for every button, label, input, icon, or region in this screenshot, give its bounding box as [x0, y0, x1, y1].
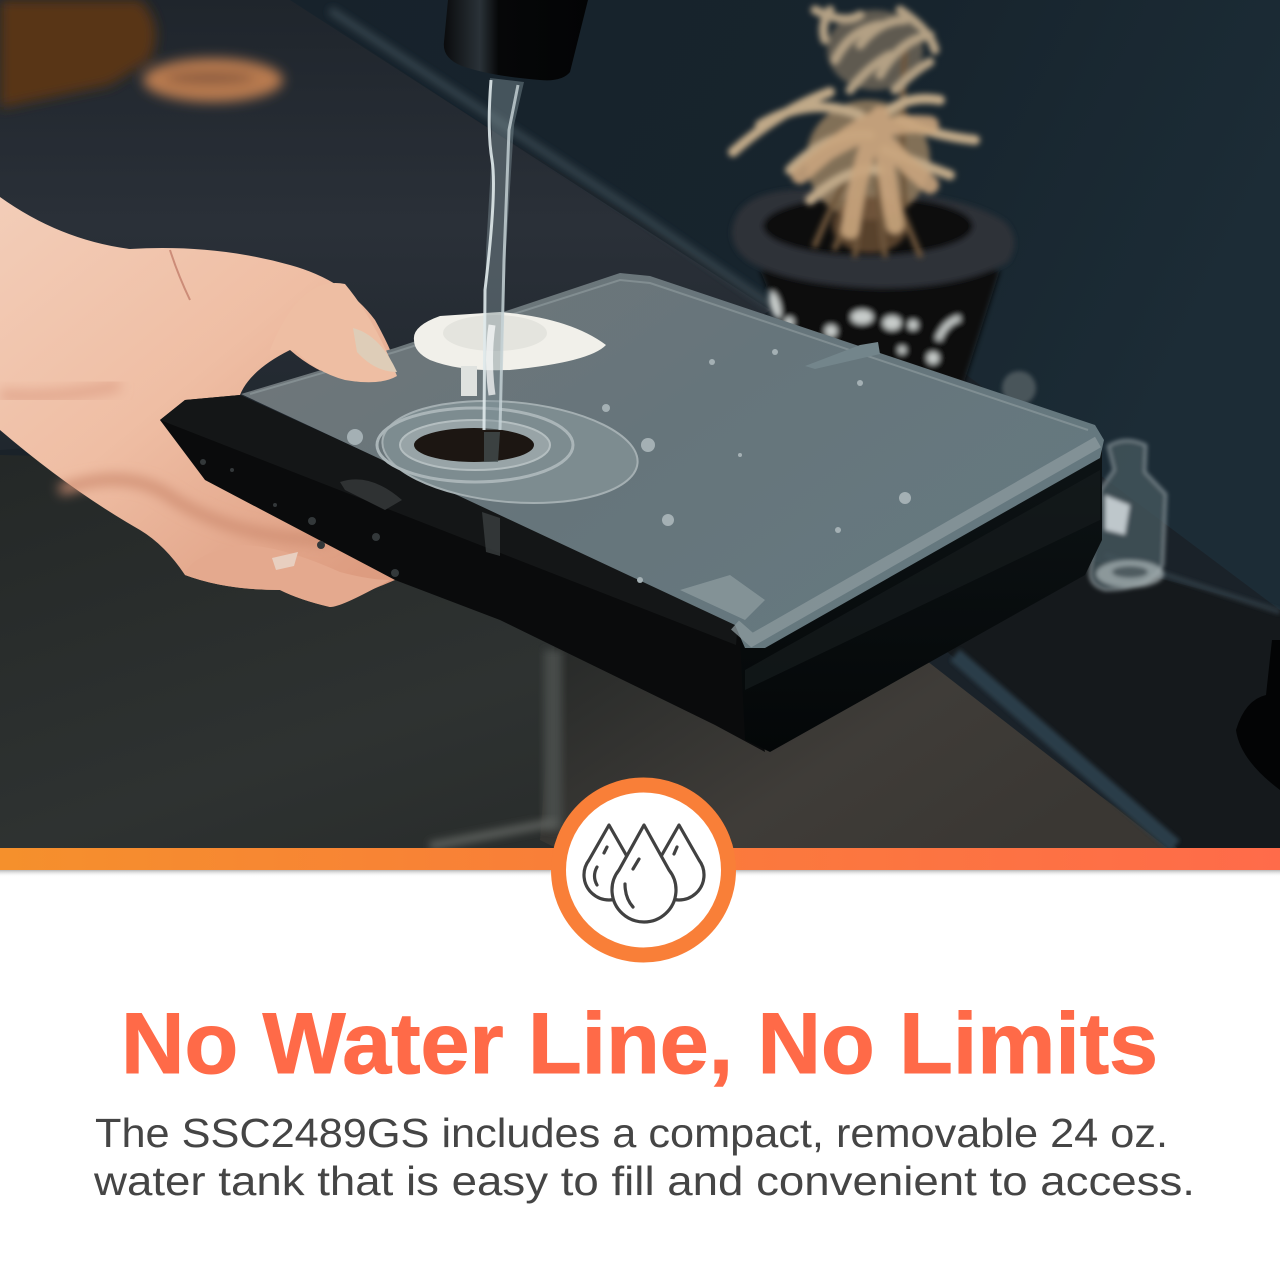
- potted plant: [732, 10, 1014, 395]
- icon badge: three water drops: [558, 785, 728, 955]
- droplets on lid: [347, 349, 911, 583]
- wooden board, blurred: [0, 0, 283, 108]
- lid opening rings: [378, 391, 642, 513]
- right countertop: [945, 560, 1280, 850]
- body text: [93, 1110, 1195, 1204]
- frosted lid: [241, 273, 1104, 648]
- body text: water tank that is easy to fill and convenient to access.: [93, 1158, 1195, 1204]
- illustration: black water tank: [160, 273, 1104, 752]
- hole: [414, 428, 534, 462]
- water droplets on tank: [200, 459, 399, 577]
- body text: The SSC2489GS includes a compact, removable 24 oz.: [95, 1110, 1168, 1156]
- glass bottles: [1002, 371, 1166, 590]
- illustration: thumb over lid: [270, 283, 397, 382]
- pot: [732, 189, 1014, 395]
- countertop behind sink: [0, 0, 770, 450]
- sink basin: [0, 455, 1180, 850]
- illustration: hand body beneath tank: [0, 197, 397, 607]
- plant foliage: [733, 10, 975, 255]
- icon: water drops: [584, 825, 704, 922]
- heading: No Water Line, No Limits: [121, 996, 1158, 1092]
- dark wall backdrop: [280, 0, 1280, 610]
- white valve cap: [414, 312, 606, 370]
- palm crease shadows: [170, 250, 190, 300]
- tank front side: [160, 395, 765, 752]
- orange divider bar: [0, 848, 1280, 877]
- faucet: [444, 0, 588, 80]
- photo: kitchen sink scene: [0, 0, 1280, 850]
- illustration: falling water stream: [482, 78, 524, 556]
